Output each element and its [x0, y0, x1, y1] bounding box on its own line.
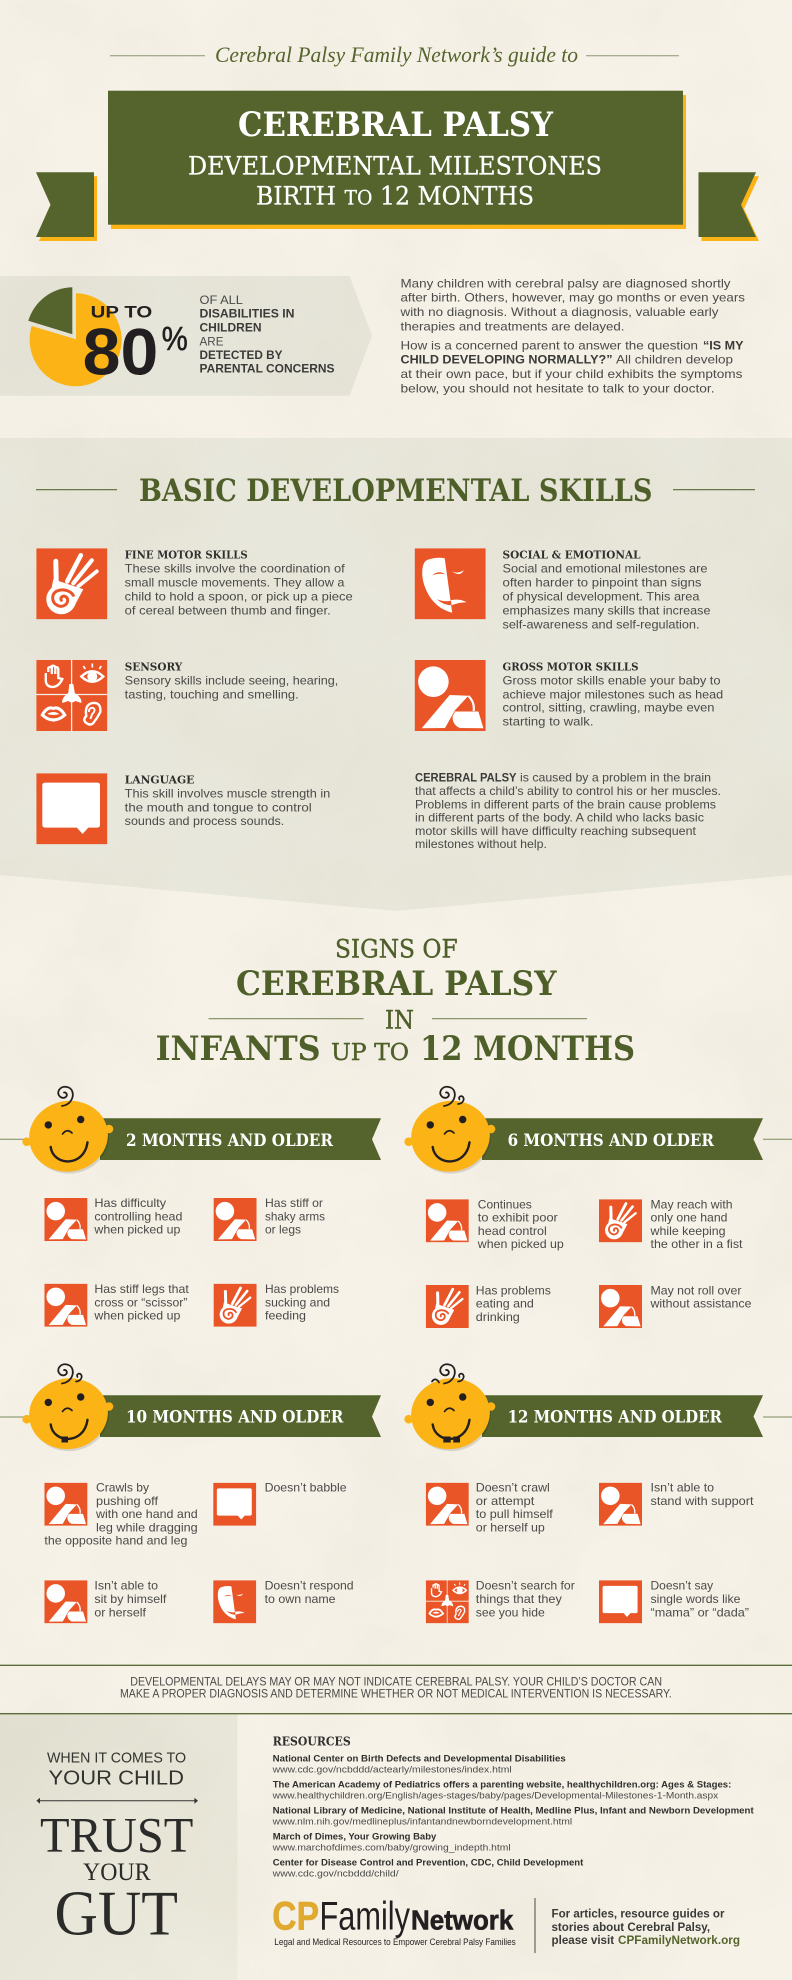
sign: poor head control: [426, 1197, 564, 1251]
sign: one hand: May reach with: [650, 1197, 732, 1211]
sign: head control: Has difficulty: [94, 1196, 166, 1210]
resources list: National Library of Medicine, National Institute of Health, Medline Plus, Infant and Newborn Development: [273, 1806, 755, 1817]
sign: stiff arms: or legs: [265, 1223, 301, 1237]
cerebral palsy explanation: milestones without help.: [415, 837, 547, 851]
call to action: [535, 1898, 740, 1953]
skill: gross motor: starting to walk.: [502, 715, 594, 729]
intro paragraph: Many children with cerebral palsy are diagnosed shortly: [400, 276, 730, 290]
cerebral palsy explanation: [415, 771, 721, 851]
skill: language: the mouth and tongue to control: [125, 800, 312, 814]
disclaimer: [0, 1665, 792, 1714]
sign: searching: [426, 1579, 575, 1623]
sign: head control: controlling head: [94, 1209, 182, 1223]
intro paragraph: CHILD DEVELOPING NORMALLY?”: [400, 353, 612, 367]
sign: eating problems: Has problems: [476, 1283, 551, 1297]
skill: gross motor: control, sitting, crawling, maybe even: [502, 701, 714, 715]
sign: standing: Isn’t able to: [650, 1481, 714, 1495]
skill: language: sounds and process sounds.: [125, 814, 284, 828]
sign: crawling: leg while dragging: [96, 1520, 198, 1534]
sign: feeding problems: [214, 1282, 339, 1327]
intro paragraph: All children develop: [616, 353, 733, 367]
icon: mask: [415, 548, 486, 619]
sign: standing: stand with support: [650, 1494, 754, 1508]
logo: CP Family Network: [272, 1894, 516, 1948]
sign: poor head control: to exhibit poor: [478, 1211, 558, 1225]
sign: single words: single words like: [650, 1592, 741, 1606]
trust your gut message: WHEN IT COMES TO: [47, 1751, 186, 1767]
trust your gut message: GUT: [54, 1878, 178, 1948]
sign: babble: Doesn’t babble: [265, 1481, 347, 1495]
call to action: stories about Cerebral Palsy,: [552, 1922, 710, 1934]
age group: 12 months: [404, 1364, 792, 1623]
sign: feeding problems: feeding: [265, 1309, 306, 1323]
sign: standing: [599, 1481, 754, 1526]
pie chart: up to 80%: [28, 287, 188, 388]
resources list: www.cdc.gov/ncbddd/actearly/milestones/index.html: [272, 1764, 512, 1775]
sign: single words: Doesn’t say: [650, 1579, 713, 1593]
heading: signs of cerebral palsy: UP TO: [331, 1040, 409, 1066]
statistic caption: [200, 293, 334, 376]
pie chart: up to 80%: UP TO: [91, 303, 152, 322]
pie chart: up to 80%: 80: [83, 314, 158, 388]
icon: crawling baby: [415, 660, 486, 731]
skill: sensory: SENSORY: [125, 660, 183, 674]
sign: stiff legs: Has stiff legs that: [94, 1282, 189, 1296]
trust your gut message: [36, 1751, 198, 1948]
trust your gut message: YOUR CHILD: [48, 1767, 184, 1790]
statistic caption: CHILDREN: [200, 320, 262, 334]
skill: fine motor: of cereal between thumb and finger.: [125, 603, 331, 617]
sign: head control: when picked up: [93, 1223, 181, 1237]
sign: sitting: sit by himself: [94, 1592, 167, 1606]
sign: rolling over: [599, 1283, 752, 1328]
statistic caption: ARE: [200, 334, 224, 348]
icon: speech bubble: [36, 773, 107, 844]
sign: rolling over: without assistance: [649, 1297, 752, 1311]
heading: signs of cerebral palsy: CEREBRAL PALSY: [236, 964, 557, 1004]
sign: poor head control: head control: [478, 1224, 547, 1238]
heading: signs of cerebral palsy: INFANTS: [156, 1029, 321, 1069]
call to action: please visit: [552, 1935, 614, 1947]
age group: 10 months: 10 MONTHS AND OLDER: [126, 1408, 344, 1427]
sign: stiff legs: [44, 1282, 189, 1327]
cerebral palsy explanation: that affects a child’s ability to control his or her muscles.: [415, 784, 721, 798]
intro paragraph: How is a concerned parent to answer the question: [400, 338, 698, 352]
panel: statistic arrow band: [0, 276, 372, 396]
heading: basic developmental skills: BASIC DEVELOPMENTAL SKILLS: [139, 473, 652, 509]
heading: signs of cerebral palsy: IN: [385, 1005, 414, 1034]
sign: single words: “mama” or “dada”: [650, 1605, 749, 1619]
resources list: [272, 1734, 755, 1880]
skill: language: [36, 773, 330, 844]
resources list: www.cdc.gov/ncbddd/child/: [272, 1869, 399, 1880]
skill: sensory: [36, 660, 338, 731]
sign: own name: Doesn’t respond: [265, 1579, 354, 1593]
skill: social and emotional: [415, 548, 711, 631]
pie chart: up to 80%: %: [162, 320, 188, 357]
title banner: CEREBRAL PALSY: [238, 105, 554, 145]
sign: one hand: [599, 1197, 743, 1251]
cerebral palsy explanation: motor skills will have difficulty reaching subsequent: [415, 824, 697, 838]
title banner: [36, 91, 759, 241]
skill: gross motor: GROSS MOTOR SKILLS: [502, 660, 638, 674]
sign: one hand: while keeping: [649, 1224, 726, 1238]
sign: pull up: or herself up: [476, 1520, 545, 1534]
cerebral palsy explanation: is caused by a problem in the brain: [520, 771, 711, 785]
trust your gut message: TRUST: [40, 1806, 193, 1862]
sign: crawling: pushing off: [96, 1494, 159, 1508]
sign: pull up: [426, 1481, 553, 1534]
icon: baby face with one tooth: [22, 1364, 115, 1457]
statistic caption: DISABILITIES IN: [200, 307, 294, 321]
title banner: DEVELOPMENTAL MILESTONES: [188, 152, 602, 181]
title banner: BIRTH: [256, 182, 336, 211]
sign: one hand: the other in a fist: [650, 1237, 743, 1251]
skill: gross motor: Gross motor skills enable your baby to: [502, 673, 721, 687]
skill: social and emotional: Social and emotional milestones are: [502, 562, 708, 576]
skill: social and emotional: of physical development. This area: [502, 589, 700, 603]
icon: hand: [36, 548, 107, 619]
cerebral palsy explanation: CEREBRAL PALSY: [415, 771, 516, 785]
skill: social and emotional: often harder to pinpoint than signs: [502, 576, 702, 590]
resources list: www.nlm.nih.gov/medlineplus/infantandnewborndevelopment.html: [272, 1816, 572, 1827]
sign: pull up: to pull himself: [476, 1507, 553, 1521]
logo: CP Family Network: Legal and Medical Resources to Empower Cerebral Palsy Families: [274, 1937, 516, 1948]
sign: eating problems: [426, 1283, 551, 1328]
logo: CP Family Network: CP: [272, 1894, 319, 1938]
intro paragraph: with no diagnosis. Without a diagnosis, valuable early: [399, 305, 718, 319]
sign: poor head control: when picked up: [477, 1237, 564, 1251]
logo: CP Family Network: Network: [411, 1904, 514, 1935]
sign: crawling: [44, 1481, 198, 1548]
sign: sitting: [44, 1579, 167, 1623]
disclaimer: MAKE A PROPER DIAGNOSIS AND DETERMINE WHETHER OR NOT MEDICAL INTERVENTION IS NECESSARY.: [120, 1689, 672, 1701]
sign: stiff arms: shaky arms: [265, 1209, 325, 1223]
resources list: March of Dimes, Your Growing Baby: [273, 1832, 437, 1843]
heading: signs of cerebral palsy: SIGNS OF: [335, 934, 458, 963]
skill: fine motor: [36, 548, 353, 619]
logo: CP Family Network: Family: [320, 1894, 410, 1938]
sign: single words: [599, 1579, 749, 1623]
sign: pull up: Doesn’t crawl: [476, 1481, 550, 1495]
sign: stiff arms: [214, 1196, 325, 1241]
icon: baby face: [22, 1087, 115, 1180]
resources list: The American Academy of Pediatrics offers a parenting website, healthychildren.org: Ages & Stages:: [273, 1779, 731, 1790]
disclaimer: DEVELOPMENTAL DELAYS MAY OR MAY NOT INDICATE CEREBRAL PALSY. YOUR CHILD’S DOCTOR CAN: [130, 1677, 662, 1689]
age group: 6 months: 6 MONTHS AND OLDER: [508, 1131, 714, 1150]
resources list: www.healthychildren.org/English/ages-stages/baby/pages/Developmental-Milestones-1-Month.aspx: [272, 1790, 718, 1801]
sign: stiff legs: when picked up: [93, 1309, 181, 1323]
age group: 10 months: [0, 1364, 381, 1623]
sign: searching: things that they: [476, 1592, 562, 1606]
sign: crawling: the opposite hand and leg: [44, 1534, 187, 1548]
panel: trust your gut background: [0, 1714, 237, 1980]
skill: sensory: tasting, touching and smelling.: [125, 687, 299, 701]
icon: baby face with two teeth: [404, 1364, 497, 1457]
skill: fine motor: small muscle movements. They allow a: [125, 576, 345, 590]
skill: social and emotional: self-awareness and self-regulation.: [502, 617, 700, 631]
sign: sitting: Isn’t able to: [94, 1579, 158, 1593]
sign: searching: see you hide: [476, 1605, 545, 1619]
intro paragraph: [399, 276, 745, 395]
icon: senses: [36, 660, 107, 731]
sign: one hand: only one hand: [650, 1211, 728, 1225]
sign: crawling: Crawls by: [96, 1481, 149, 1495]
panel: basic skills band: [0, 438, 792, 911]
sign: stiff legs: cross or “scissor”: [94, 1295, 187, 1309]
sign: babble: [213, 1481, 347, 1526]
skill: fine motor: child to hold a spoon, or pick up a piece: [125, 589, 353, 603]
sign: stiff arms: Has stiff or: [265, 1196, 323, 1210]
age group: 2 months: 2 MONTHS AND OLDER: [126, 1131, 333, 1150]
sign: own name: to own name: [265, 1592, 336, 1606]
skill: gross motor: [415, 660, 723, 731]
skill: sensory: Sensory skills include seeing, hearing,: [125, 673, 338, 687]
skill: social and emotional: emphasizes many skills that increase: [502, 603, 711, 617]
sign: feeding problems: sucking and: [265, 1295, 330, 1309]
age group: 12 months: 12 MONTHS AND OLDER: [508, 1408, 722, 1427]
cerebral palsy explanation: in different parts of the body. A child who lacks basic: [415, 811, 704, 825]
resources list: Center for Disease Control and Prevention, CDC, Child Development: [273, 1858, 584, 1869]
resources list: RESOURCES: [273, 1734, 351, 1749]
call to action: CPFamilyNetwork.org: [618, 1935, 740, 1947]
resources list: www.marchofdimes.com/baby/growing_indepth.html: [272, 1842, 511, 1853]
sign: sitting: or herself: [94, 1605, 147, 1619]
sign: rolling over: May not roll over: [650, 1283, 742, 1297]
heading: signs of cerebral palsy: [156, 934, 635, 1069]
intro paragraph: “IS MY: [703, 338, 744, 352]
resources list: National Center on Birth Defects and Developmental Disabilities: [273, 1753, 566, 1764]
sign: searching: Doesn’t search for: [476, 1579, 575, 1593]
cerebral palsy explanation: Problems in different parts of the brain cause problems: [415, 797, 716, 811]
sign: poor head control: Continues: [478, 1197, 532, 1211]
sign: pull up: or attempt: [476, 1494, 535, 1508]
call to action: For articles, resource guides or: [552, 1909, 725, 1921]
age group: 2 months: [0, 1087, 381, 1327]
skill: language: LANGUAGE: [125, 773, 195, 787]
age group: 6 months: [404, 1087, 792, 1328]
statistic caption: PARENTAL CONCERNS: [200, 362, 334, 376]
skill: fine motor: These skills involve the coordination of: [125, 562, 345, 576]
intro paragraph: below, you should not hesitate to talk to your doctor.: [400, 381, 714, 395]
trust your gut message: YOUR: [83, 1859, 151, 1886]
title banner: TO: [344, 186, 372, 210]
statistic caption: OF ALL: [200, 293, 243, 307]
sign: eating problems: drinking: [476, 1310, 520, 1324]
skill: gross motor: achieve major milestones such as head: [502, 687, 723, 701]
skill: social and emotional: SOCIAL & EMOTIONAL: [502, 548, 640, 562]
intro paragraph: at their own pace, but if your child exhibits the symptoms: [400, 367, 742, 381]
sign: head control: [44, 1196, 182, 1241]
title banner: 12 MONTHS: [380, 182, 534, 211]
sign: eating problems: eating and: [476, 1297, 534, 1311]
heading: signs of cerebral palsy: 12 MONTHS: [420, 1029, 635, 1069]
sign: own name: [213, 1579, 354, 1623]
guide intro line: Cerebral Palsy Family Network’s guide to: [215, 42, 578, 67]
statistic caption: DETECTED BY: [200, 348, 282, 362]
sign: feeding problems: Has problems: [265, 1282, 339, 1296]
skill: fine motor: FINE MOTOR SKILLS: [125, 548, 248, 562]
icon: baby face with two curls: [404, 1087, 497, 1180]
intro paragraph: therapies and treatments are delayed.: [400, 319, 624, 333]
skill: language: This skill involves muscle strength in: [125, 786, 330, 800]
sign: crawling: with one hand and: [95, 1507, 198, 1521]
intro paragraph: after birth. Others, however, may go months or even years: [400, 291, 745, 305]
